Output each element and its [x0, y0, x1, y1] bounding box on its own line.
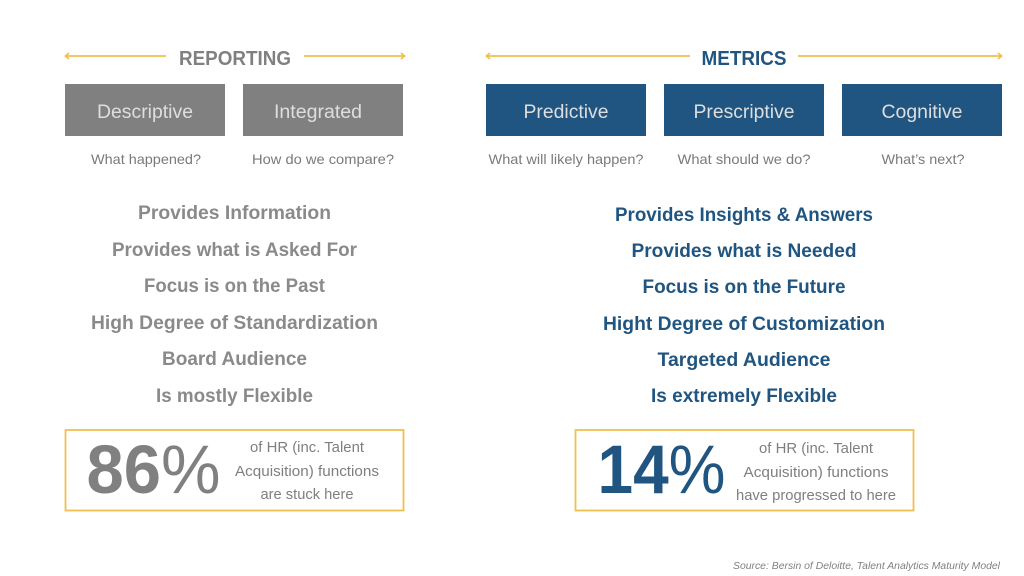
text block: metrics characteristics: Targeted Audience: [658, 350, 830, 371]
text block: reporting characteristics: Focus is on the Past: [144, 276, 326, 297]
box: integrated: Integrated: [274, 102, 362, 123]
callout: 86 percent: 86%: [86, 431, 220, 508]
caption: what's next: What’s next?: [882, 151, 965, 167]
heading: reporting: REPORTING: [179, 47, 291, 70]
text block: reporting characteristics: Board Audience: [162, 349, 307, 370]
text block: metrics characteristics: Provides Insights & Answers: [615, 205, 873, 226]
text block: reporting characteristics: Provides Information: [138, 203, 331, 224]
text block: reporting characteristics: [91, 203, 378, 407]
caption: what should we do: What should we do?: [678, 151, 811, 167]
arrow: reporting right: [304, 53, 404, 59]
text block: reporting characteristics: Is mostly Flexible: [156, 386, 313, 407]
text block: metrics characteristics: Is extremely Flexible: [651, 386, 837, 407]
callout: 14 percent: 14%: [598, 431, 726, 508]
caption: what will likely happen: What will likely happen?: [488, 151, 644, 167]
callout: 86 percent: of HR (inc. Talent: [250, 440, 364, 456]
callout: 14 percent: Acquisition) functions: [744, 465, 888, 481]
text block: reporting characteristics: Provides what is Asked For: [112, 240, 358, 261]
box: cognitive: Cognitive: [882, 102, 962, 123]
heading: metrics: METRICS: [702, 47, 786, 70]
caption: how do we compare: How do we compare?: [252, 151, 394, 167]
callout: 14 percent: [576, 430, 914, 510]
box: cognitive: [842, 84, 1002, 136]
text block: metrics characteristics: Focus is on the Future: [642, 277, 846, 298]
box: prescriptive: Prescriptive: [694, 102, 794, 123]
box: descriptive: [65, 84, 225, 136]
arrow: reporting left: [66, 53, 166, 59]
arrow: metrics left: [486, 53, 690, 59]
source note: Source: Bersin of Deloitte, Talent Analytics Maturity Model: [733, 560, 1001, 572]
callout: 14 percent: of HR (inc. Talent: [759, 441, 873, 457]
text block: reporting characteristics: High Degree of Standardization: [91, 313, 378, 334]
text block: metrics characteristics: Hight Degree of Customization: [603, 314, 885, 335]
callout: 86 percent: [66, 430, 404, 510]
box: predictive: Predictive: [524, 102, 608, 123]
arrow: metrics right: [798, 53, 1002, 59]
text block: metrics characteristics: [603, 205, 885, 407]
box: prescriptive: [664, 84, 824, 136]
box: descriptive: Descriptive: [97, 102, 193, 123]
callout: 86 percent: are stuck here: [260, 487, 354, 503]
box: integrated: [243, 84, 403, 136]
text block: metrics characteristics: Provides what is Needed: [632, 241, 856, 262]
callout: 86 percent: Acquisition) functions: [235, 464, 379, 480]
callout: 14 percent: have progressed to here: [736, 488, 896, 504]
box: predictive: [486, 84, 646, 136]
caption: what happened: What happened?: [91, 151, 201, 167]
